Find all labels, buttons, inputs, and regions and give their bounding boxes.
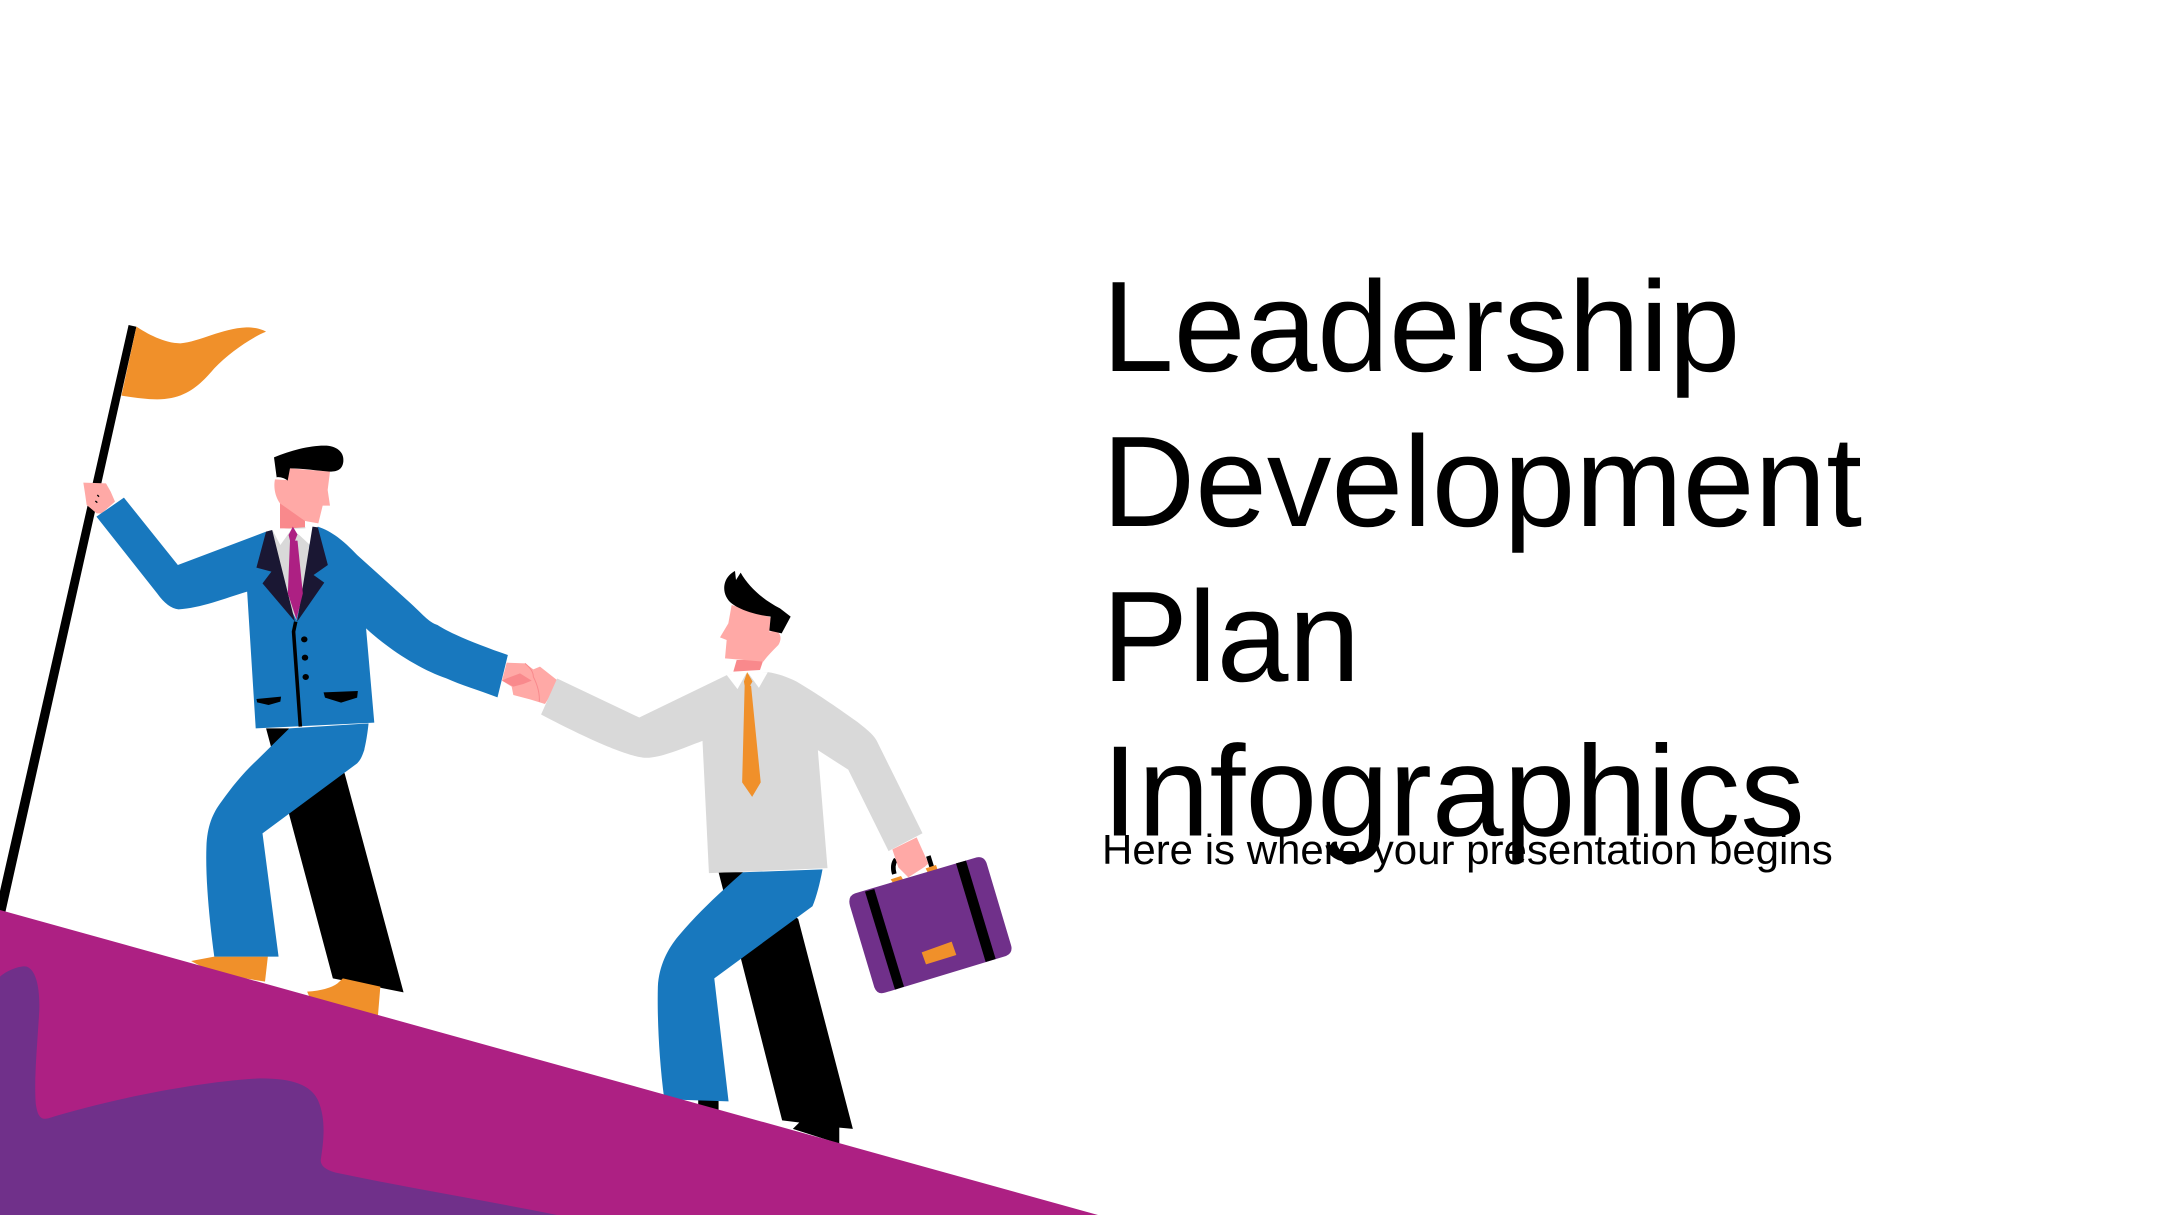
- man with briefcase: legs: [658, 869, 853, 1144]
- front leg: [658, 869, 822, 1101]
- hand on pole: [83, 483, 115, 513]
- hand on briefcase: [892, 837, 928, 877]
- tie: [288, 527, 303, 619]
- flag pole: [0, 325, 136, 912]
- lapels: [256, 527, 328, 622]
- pockets: [256, 691, 358, 705]
- shirt and arms: [541, 672, 922, 873]
- front shoe: [191, 957, 268, 982]
- briefcase: [849, 856, 1012, 993]
- collar: [272, 521, 318, 545]
- man with briefcase: head: [720, 571, 791, 672]
- back leg: [719, 872, 853, 1144]
- hillside purple shape: [0, 966, 557, 1215]
- buttons: [301, 636, 309, 680]
- shirt: [272, 527, 311, 620]
- man with flag: upper body: [96, 498, 508, 728]
- flag: [121, 327, 266, 399]
- man with flag: neck and face: [274, 446, 343, 528]
- suit jacket: [96, 498, 508, 728]
- jacket front line: [294, 622, 300, 727]
- subtitle: Here is where your presentation begins: [1102, 826, 1833, 873]
- tie: [742, 672, 761, 797]
- man with flag: legs and shoes: [191, 723, 404, 1017]
- front shoe: [698, 1099, 719, 1114]
- title: [1102, 255, 1862, 864]
- man with briefcase: shirt: [541, 672, 922, 873]
- back leg: [266, 728, 404, 992]
- hillside: [0, 910, 1098, 1215]
- collar: [727, 672, 768, 689]
- title: Infographics: [1102, 720, 1805, 864]
- title: Leadership: [1102, 255, 1740, 399]
- title: Development: [1102, 410, 1862, 554]
- back shoe: [307, 978, 380, 1017]
- front leg: [206, 723, 369, 957]
- handshake: [502, 663, 559, 704]
- title: Plan: [1102, 565, 1360, 709]
